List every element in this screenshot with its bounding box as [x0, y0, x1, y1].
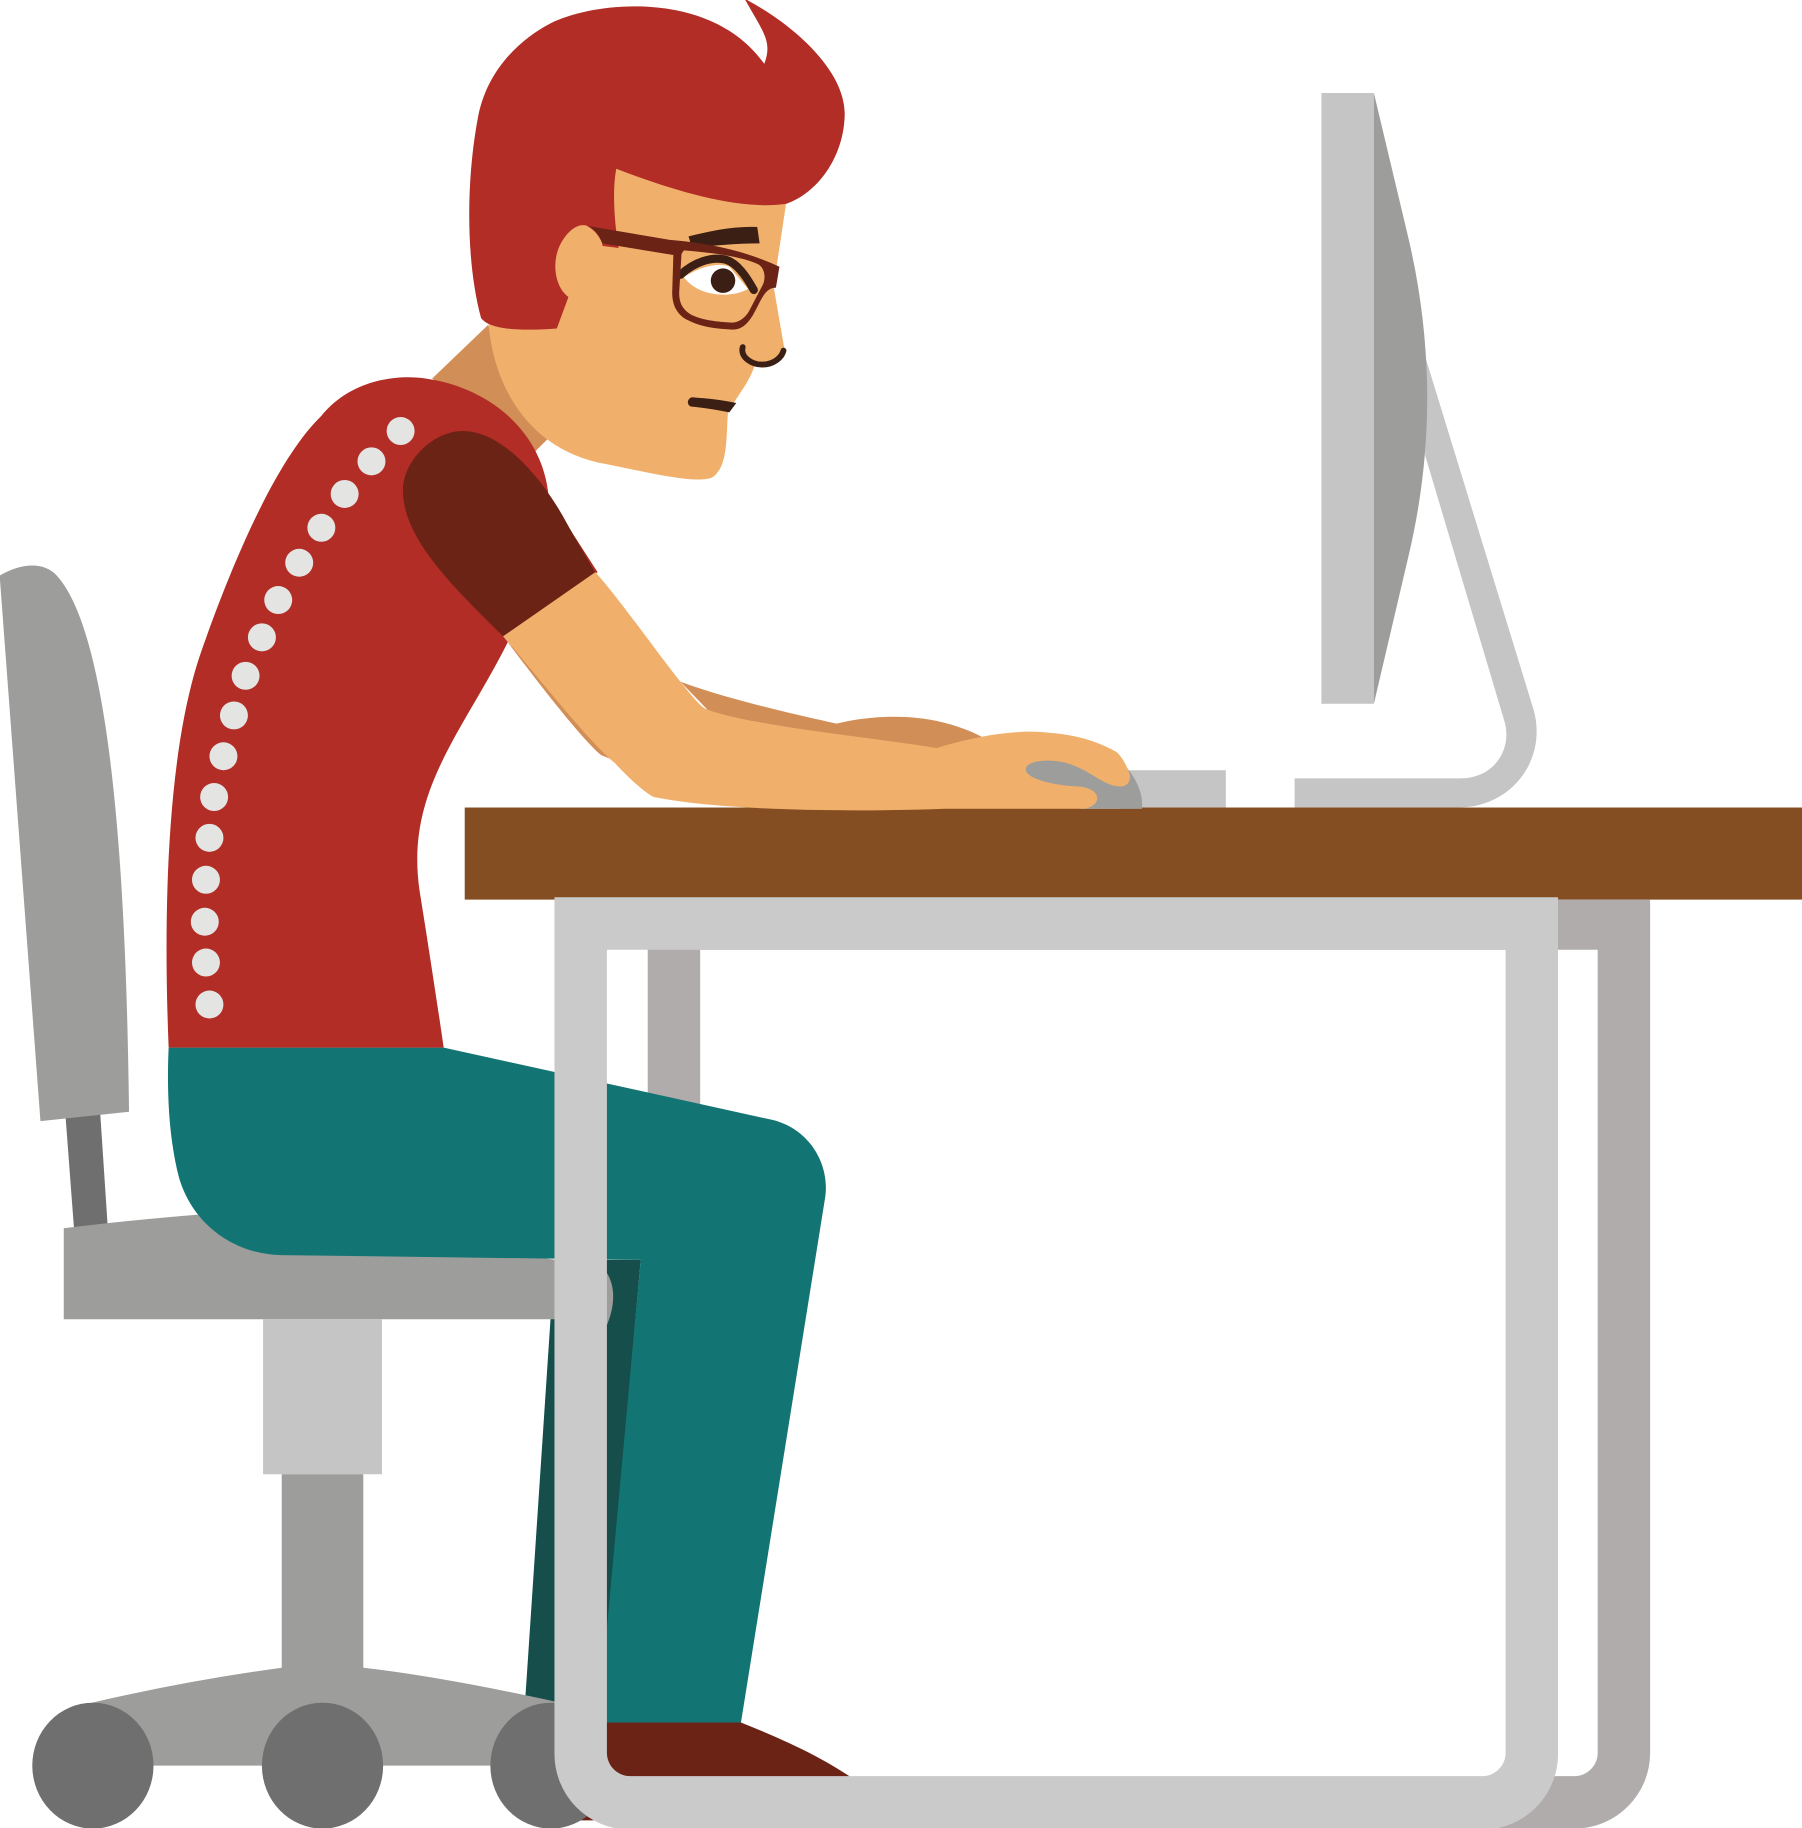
chair backrest	[0, 566, 129, 1121]
eye white	[684, 265, 748, 295]
front desk frame	[554, 897, 1558, 1828]
hair	[469, 0, 845, 330]
pupil	[711, 268, 735, 293]
chair base	[92, 1668, 560, 1766]
chair post	[65, 1108, 108, 1232]
monitor stand	[1295, 356, 1537, 808]
under arm shadow	[507, 641, 619, 762]
rear desk frame	[648, 900, 1650, 1828]
forearm and hand	[503, 572, 1132, 810]
near shoe	[601, 1723, 849, 1780]
eyelid	[680, 259, 754, 290]
desk top	[465, 808, 1802, 900]
near leg trousers	[168, 1048, 826, 1723]
far shoe	[572, 1813, 607, 1820]
far arm shadow	[680, 682, 983, 753]
mouth	[688, 397, 736, 412]
torso shirt	[167, 377, 598, 1048]
monitor	[1295, 93, 1537, 808]
chair column upper	[263, 1319, 382, 1474]
right wheel	[490, 1703, 612, 1828]
neck	[432, 325, 549, 452]
monitor front edge	[1321, 93, 1374, 704]
glasses	[587, 226, 779, 330]
left wheel	[32, 1703, 154, 1828]
shirt sleeve	[403, 431, 595, 636]
nose line	[742, 347, 784, 365]
ear	[555, 225, 607, 304]
mouse gap in hand	[1026, 761, 1142, 809]
monitor back	[1374, 93, 1427, 704]
middle wheel	[262, 1703, 383, 1828]
chair column lower	[282, 1474, 363, 1672]
spine dots	[191, 417, 415, 1018]
chair seat	[64, 1214, 613, 1325]
face	[488, 164, 786, 480]
mouse	[1079, 759, 1142, 809]
office chair	[0, 566, 613, 1828]
head	[469, 0, 845, 480]
mouse pad block	[1129, 770, 1226, 809]
eyebrow	[689, 227, 760, 248]
far leg	[525, 1260, 641, 1710]
